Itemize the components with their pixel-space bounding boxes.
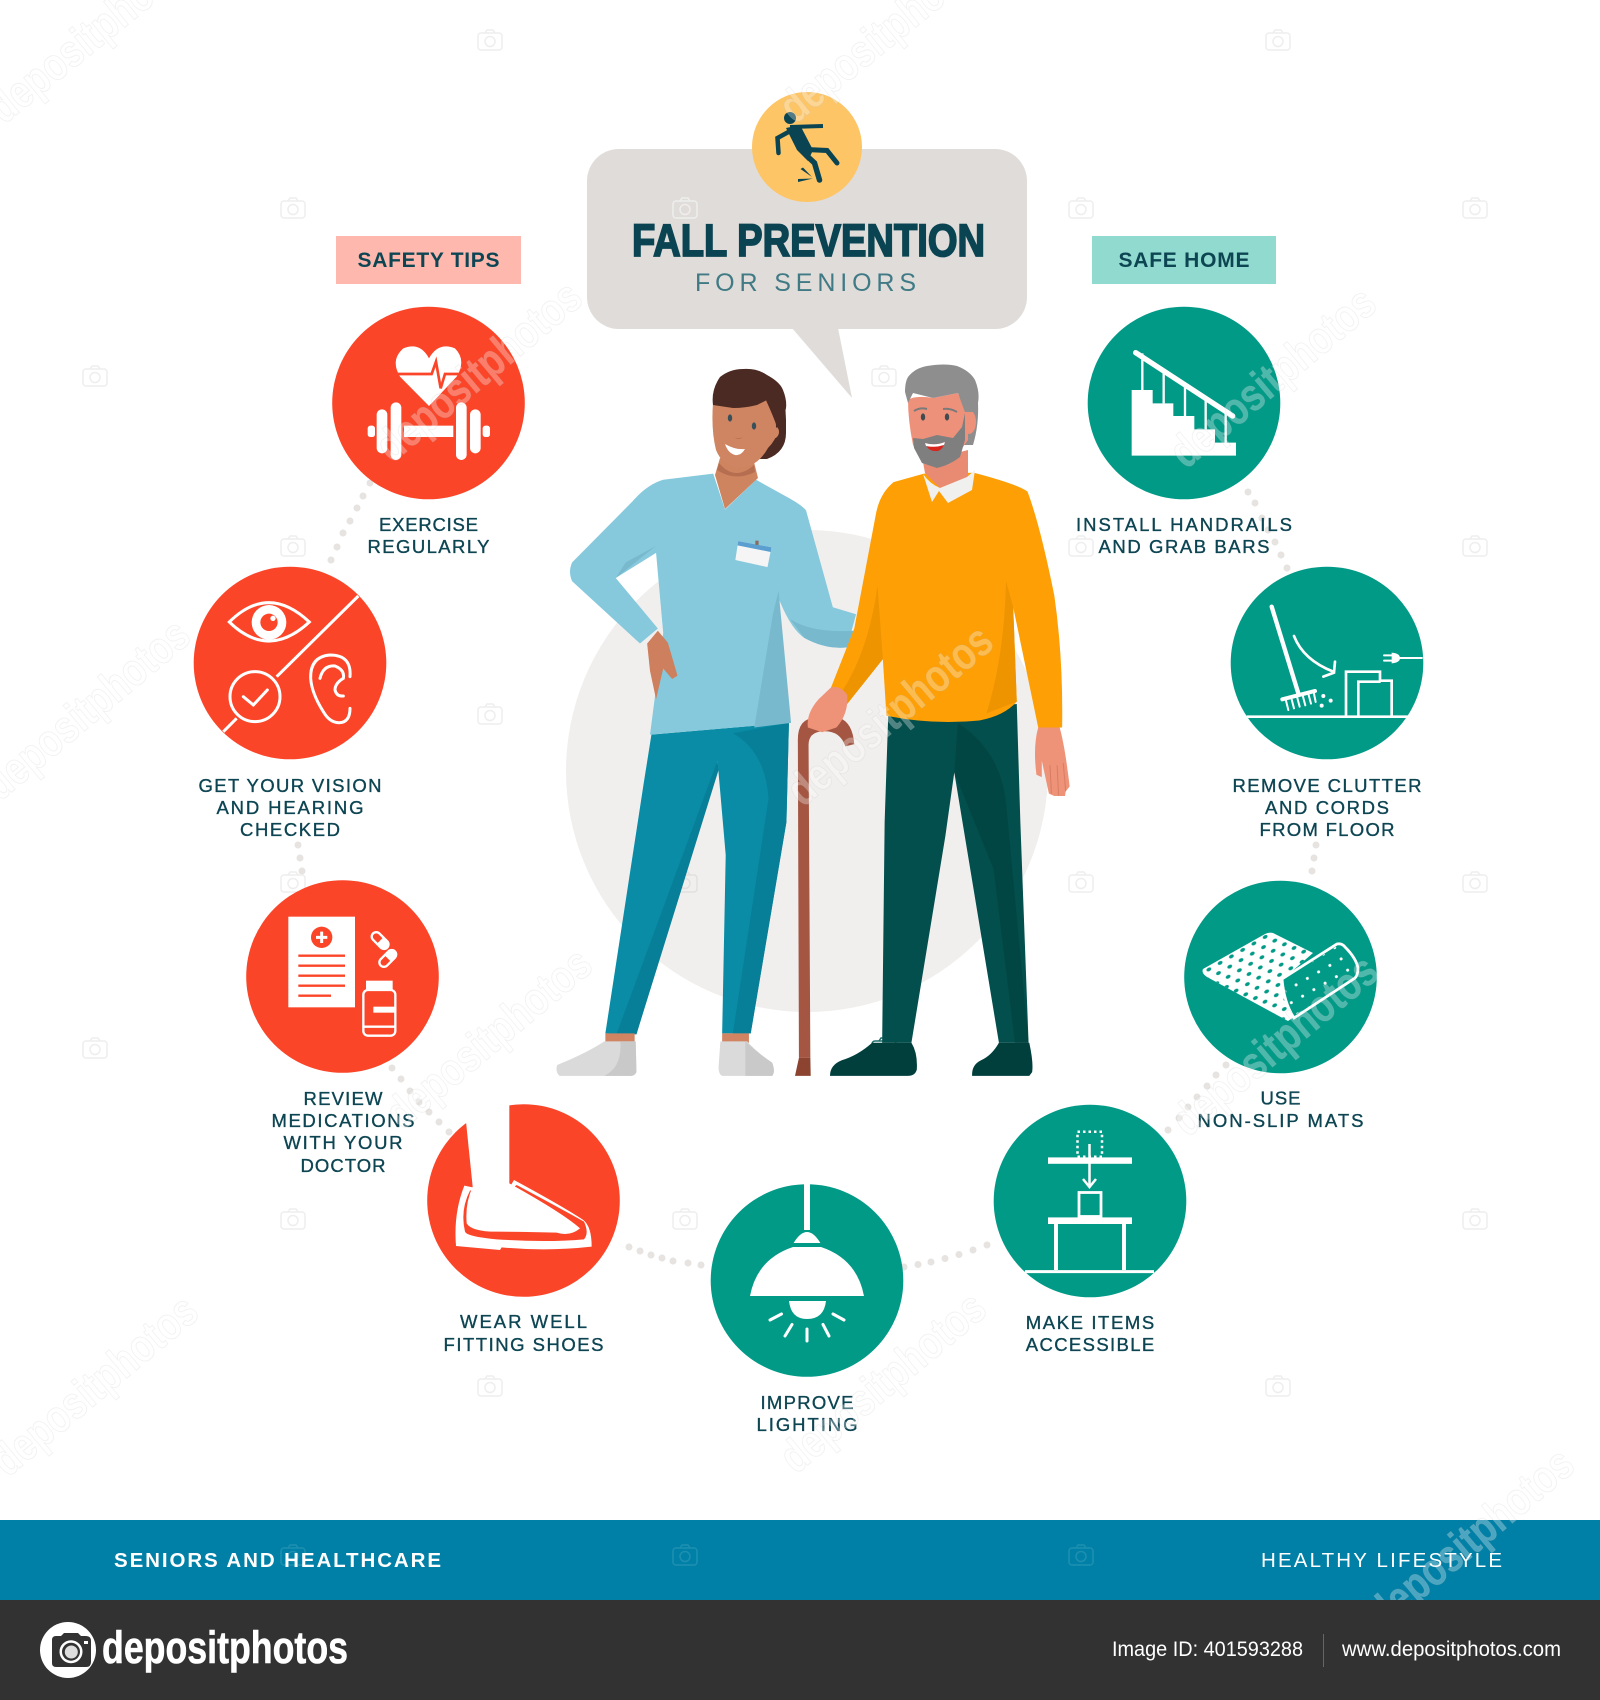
label: MAKE ITEMS [1026,1312,1154,1333]
tag: safety tips [336,236,521,284]
logo wordmark: depositphotos [102,1622,348,1673]
label [756,1392,858,1435]
icon: eye, ear and check [223,596,358,732]
logo mark [40,1622,96,1678]
icon: prescription, pills and bottle [288,917,398,1036]
icon: shelf and table [1025,1132,1154,1272]
label: AND HEARING [216,797,364,818]
icon: heart and dumbbell [368,346,490,460]
footer band: HEALTHY LIFESTYLE [1261,1549,1502,1572]
icon: ceiling lamp [750,1182,864,1341]
icon: falling person [752,92,862,202]
label [444,1311,604,1355]
label [368,514,490,557]
tag: safety tips: SAFETY TIPS [358,249,500,272]
label: REVIEW [304,1088,383,1109]
panel: well fitting shoes [427,1103,620,1355]
label: AND GRAB BARS [1098,536,1270,557]
label: NON-SLIP MATS [1198,1110,1364,1131]
subtitle: FOR SENIORS [695,269,916,297]
label: USE [1260,1088,1300,1108]
label: DOCTOR [300,1155,386,1176]
watermark overlays: depositphotos [365,270,591,472]
label: MEDICATIONS [272,1110,414,1131]
label: EXERCISE [379,514,478,535]
panel: improve lighting [711,1182,903,1435]
label [1026,1312,1154,1355]
label: ACCESSIBLE [1026,1334,1154,1355]
label: IMPROVE [760,1392,854,1413]
watermark overlays: depositphotos [1159,276,1385,478]
footer band: SENIORS AND HEALTHCARE [114,1549,441,1572]
illustration: senior man [808,364,1070,1076]
panel: review medications [246,880,439,1176]
panel: vision and hearing [194,567,386,840]
title: FALL PREVENTION [632,215,985,266]
nurse head [712,369,786,509]
man head [905,364,979,503]
dark credit bar [0,1600,1600,1700]
label: AND CORDS [1265,797,1389,818]
label: FROM FLOOR [1260,819,1394,840]
label: REMOVE CLUTTER [1232,775,1422,796]
cane [795,718,854,1076]
panel: remove clutter [1231,567,1423,840]
speech bubble [587,149,1027,398]
panel: exercise regularly [332,307,525,557]
panel: install handrails [1076,307,1292,557]
icon: foot in shoe [455,1103,592,1250]
label: INSTALL HANDRAILS [1076,514,1292,535]
label [1198,1088,1364,1131]
label [1076,514,1292,557]
label [1232,775,1422,840]
illustration: nurse [556,369,856,1076]
label: CHECKED [240,819,340,840]
label: WITH YOUR [284,1132,402,1153]
label: WEAR WELL [460,1311,587,1332]
panel: non-slip mats [1184,881,1377,1131]
tag: safe home: SAFE HOME [1118,249,1250,272]
watermark overlays: depositphotos [1161,944,1387,1146]
panel: make items accessible [994,1105,1186,1355]
tag: safe home [1092,236,1276,284]
icon: stairs with handrail [1132,353,1236,456]
label: LIGHTING [756,1414,858,1435]
label: REGULARLY [368,536,490,557]
grey backdrop circle [566,530,1048,1012]
faint camera watermarks [83,30,1487,1396]
label: FITTING SHOES [444,1334,604,1355]
website: www.depositphotos.com [1341,1638,1561,1661]
watermark overlays: depositphotos [769,1281,995,1483]
label: GET YOUR VISION [198,775,382,796]
footer band [0,1520,1600,1600]
icon: broom, boxes and plug [1247,607,1423,717]
label [272,1088,414,1176]
dotted connector ring [294,480,1320,1270]
label [198,775,382,840]
icon: rolled mat [1202,933,1358,1021]
watermark overlays: depositphotos [375,937,601,1139]
watermark overlays: depositphotos [776,614,1002,816]
image id: Image ID: 401593288 [1112,1638,1303,1661]
